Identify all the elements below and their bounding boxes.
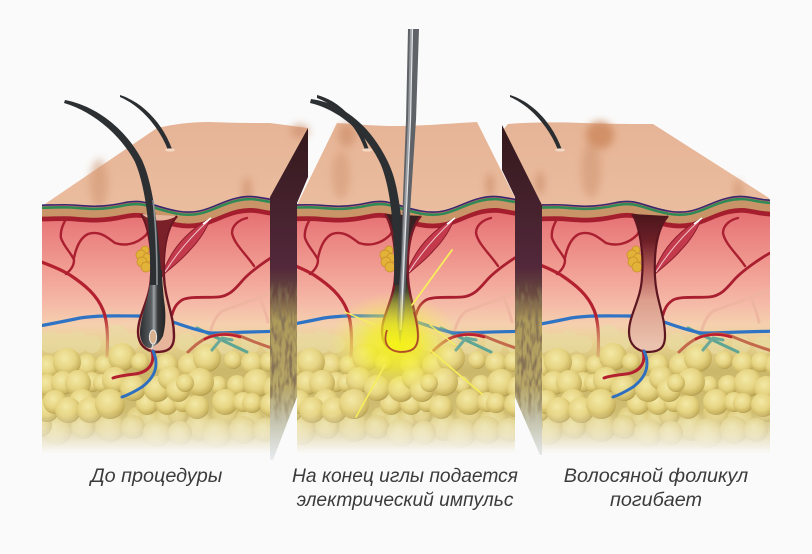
- empty dying follicle: [629, 214, 668, 352]
- short hair: [317, 95, 372, 152]
- skin cross-section tissue: [42, 196, 270, 452]
- skin cross-section tissue: [297, 196, 515, 452]
- skin surface: [297, 122, 515, 215]
- caption: follicle dies: погибает: [610, 489, 702, 511]
- caption: electric impulse: электрический импульс: [297, 490, 514, 511]
- vessels below follicle: [604, 351, 647, 397]
- needle: [397, 29, 419, 345]
- side wall: second cut: [502, 125, 545, 455]
- skin cross-section tissue: [542, 196, 770, 452]
- caption: follicle dies: Волосяной фоликул: [564, 465, 748, 487]
- panel: electric impulse at the needle tip: [297, 29, 515, 452]
- impulse glow and sparks: [329, 250, 482, 417]
- side wall: first cut: [268, 128, 308, 460]
- skin surface: [503, 121, 769, 215]
- caption: before the procedure: До процедуры: [89, 465, 223, 487]
- panel: before the procedure: [18, 95, 309, 456]
- caption: electric impulse: [292, 466, 518, 511]
- hair follicle lit by the impulse: [382, 214, 421, 352]
- short hair: [120, 95, 175, 152]
- skin surface: [42, 122, 309, 215]
- caption: electric impulse: На конец иглы подается: [292, 466, 518, 487]
- long hair: [64, 100, 162, 285]
- vessels below follicle: [113, 351, 156, 397]
- short hair: [510, 95, 565, 152]
- hair follicle with hair bulb: [138, 214, 177, 352]
- long hair: [310, 99, 406, 285]
- panel: follicle dies: [503, 95, 787, 456]
- caption: follicle dies: [564, 465, 748, 511]
